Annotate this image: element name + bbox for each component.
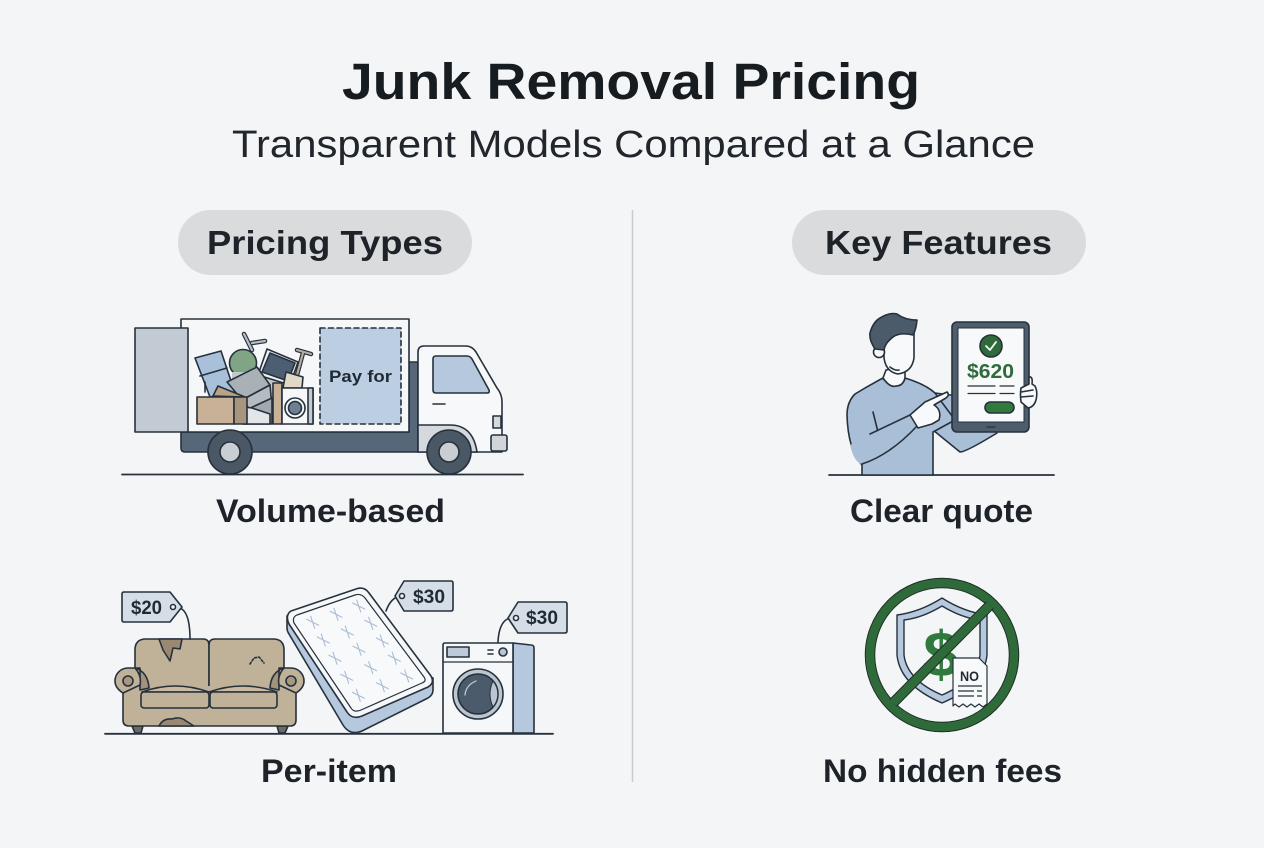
price tag: $20: $20 [131,598,162,619]
rear wheel [208,430,252,474]
per-item illustration [105,581,567,734]
label: volume-based: Volume-based [216,493,445,529]
price tag: $20 [122,592,190,639]
sofa [115,639,304,733]
pay for zone: Pay for [329,367,392,386]
holding hand [1020,377,1037,408]
heading pill: pricing types [178,210,472,275]
price tag: washer $30: $30 [526,608,558,629]
mattress [287,588,433,733]
subtitle: Transparent Models Compared at a Glance [232,124,1035,166]
price tag: mattress $30 [386,581,453,611]
label: per-item: Per-item [261,753,397,789]
front wheel [427,430,471,474]
pay for zone [320,328,401,424]
clear quote illustration [829,314,1054,475]
cab [418,346,507,452]
receipt [953,658,987,707]
open door [135,328,188,432]
person [847,314,997,475]
ground line [122,474,523,476]
washing machine [443,643,534,733]
junk pile [195,334,313,424]
chassis [181,362,418,452]
heading pill: key features [792,210,1086,275]
quote amount: $620 [967,361,1014,383]
truck illustration [122,319,523,474]
label: no hidden fees: No hidden fees [823,753,1062,789]
label: clear quote: Clear quote [850,493,1033,529]
no hidden fees icon [870,583,1014,727]
ground line [105,733,553,735]
cargo box [181,319,409,432]
prohibition ring [870,583,1014,727]
pointing hand [910,392,948,428]
panel: pricing types [105,210,567,789]
heading pill: pricing types: Pricing Types [207,224,443,261]
price tag: washer $30 [498,602,567,642]
receipt: NO [960,669,979,684]
heading pill: key features: Key Features [825,224,1052,261]
title: Junk Removal Pricing [342,53,920,110]
panel: key features [792,210,1086,789]
confirm button [985,402,1014,413]
tablet [952,322,1029,432]
ground line [829,474,1054,476]
dollar sign: $ [923,618,959,690]
price tag: mattress $30: $30 [413,587,445,608]
shield [897,598,987,703]
column divider [632,210,634,782]
check badge [980,335,1002,357]
